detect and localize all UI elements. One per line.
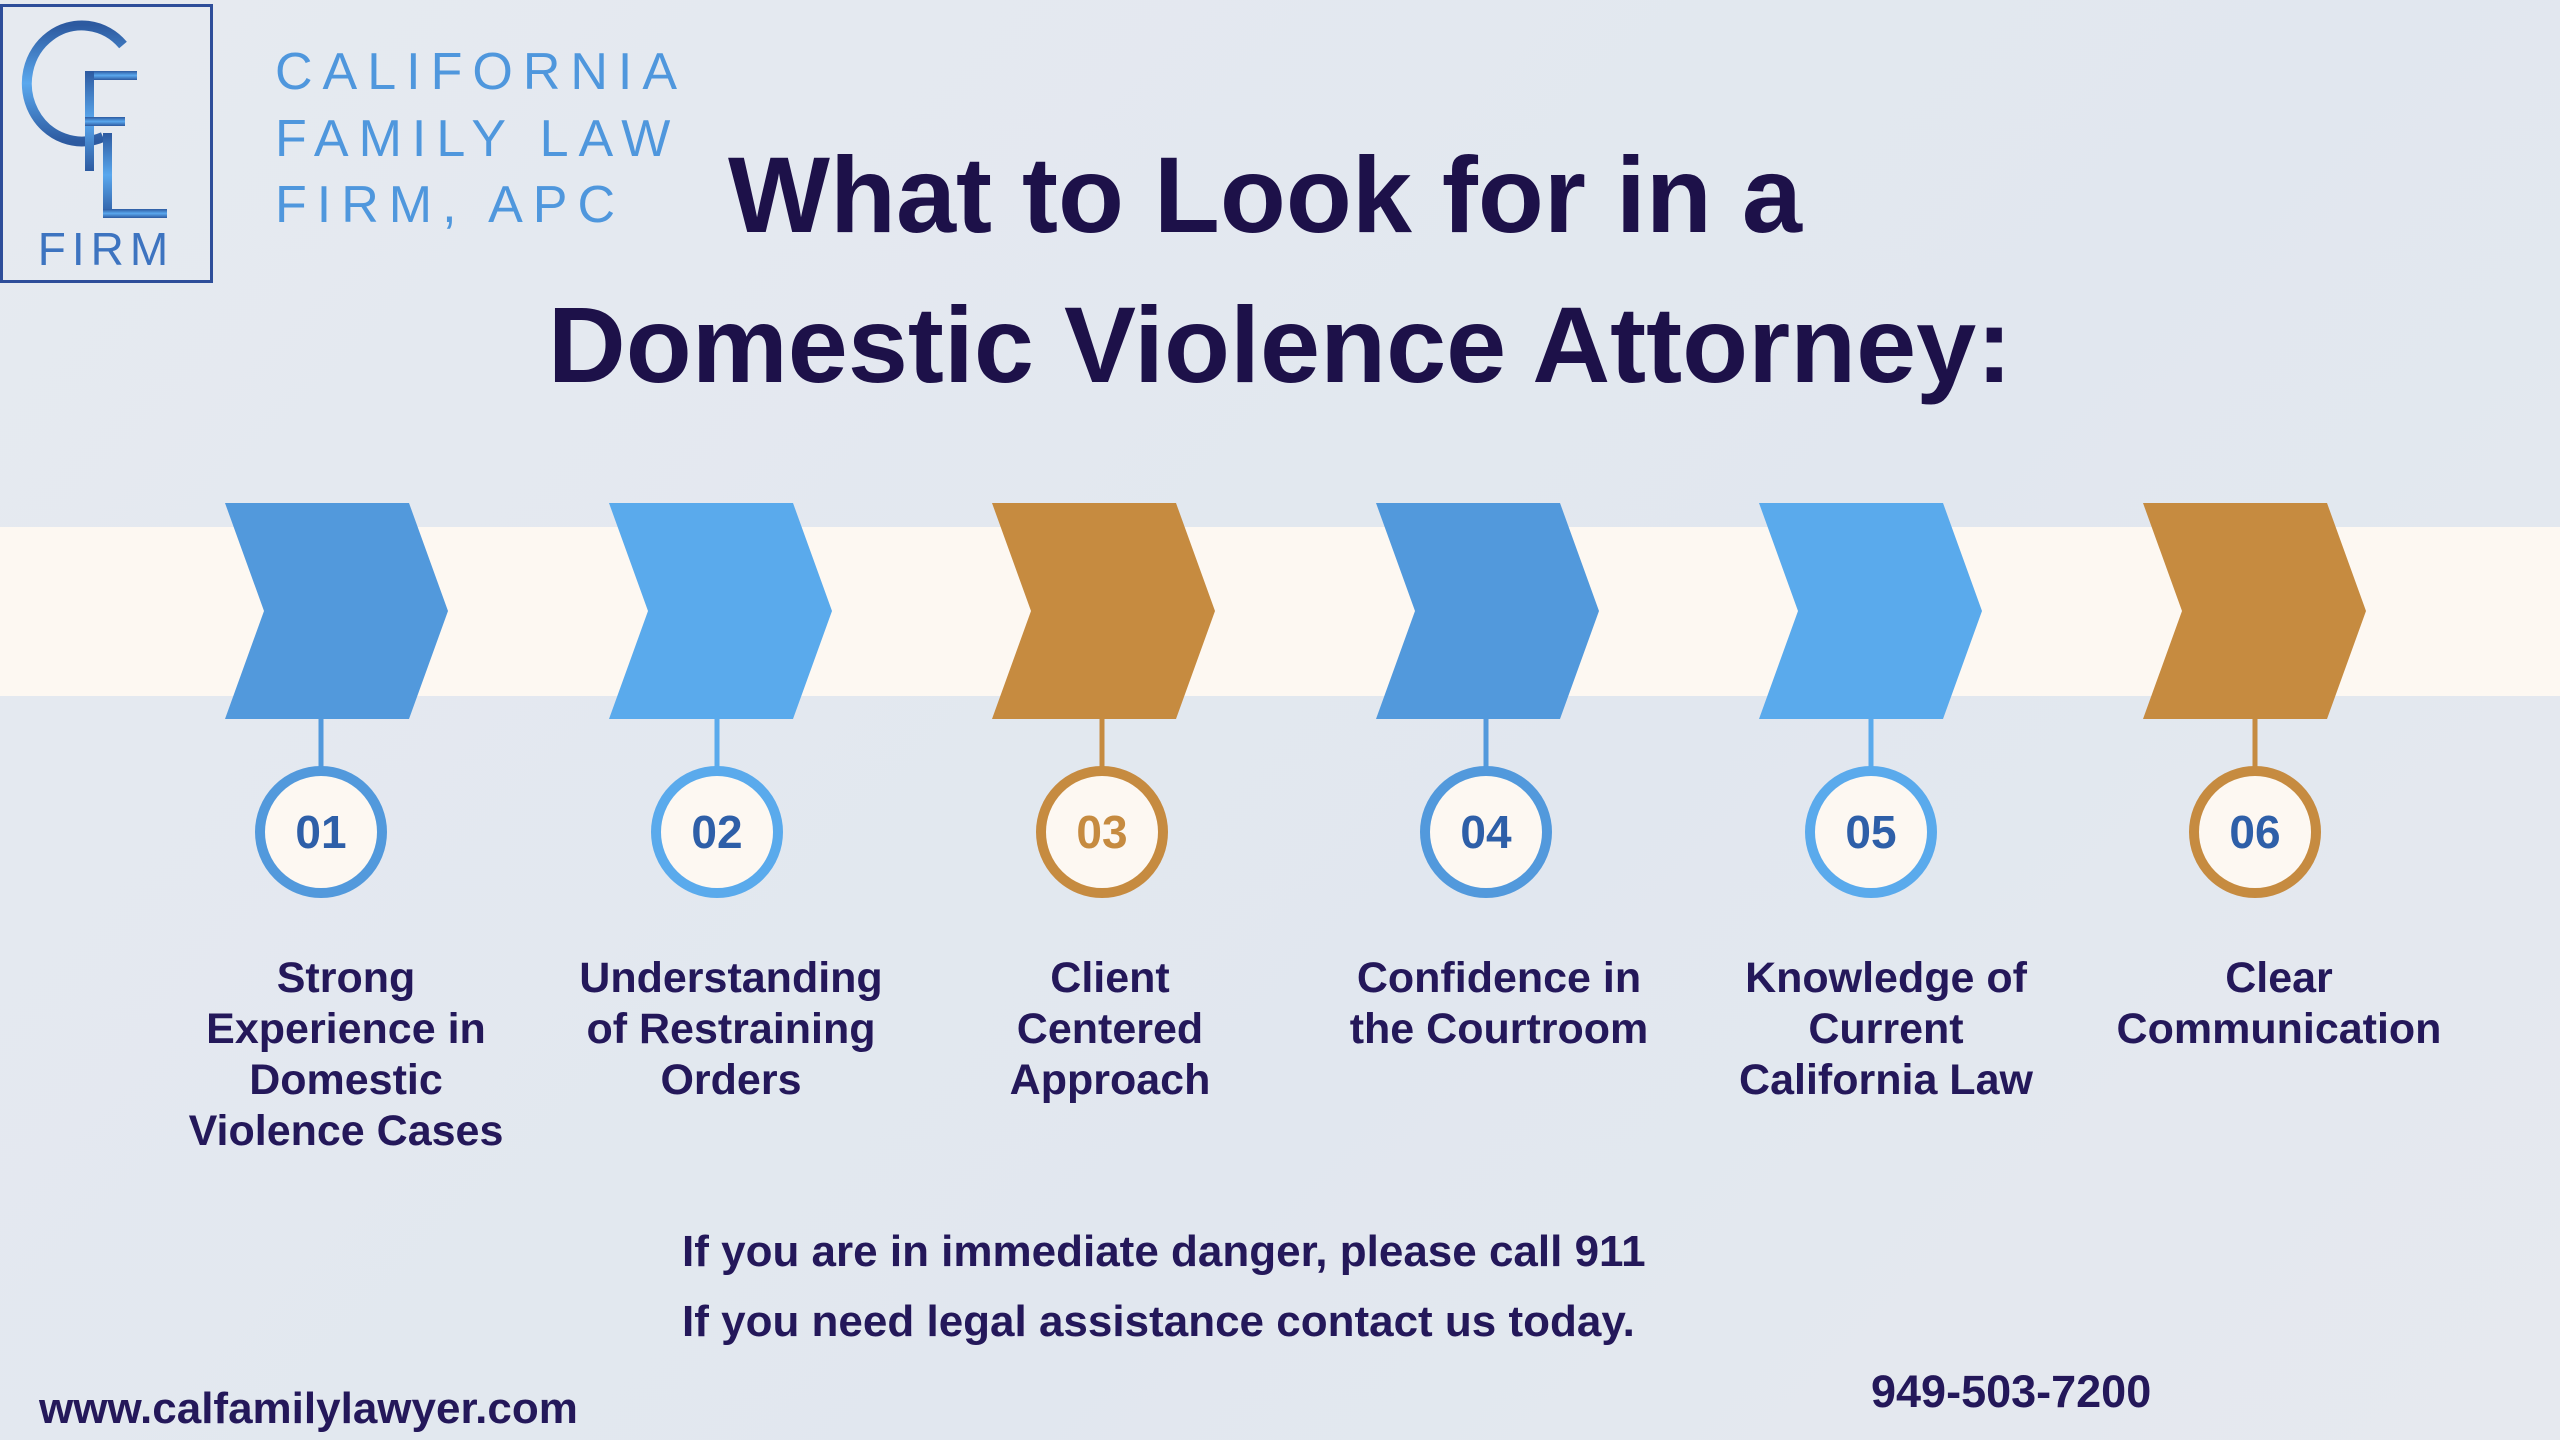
step 1 chevron: [225, 503, 448, 893]
item 4 text: the Courtroom: [1350, 1005, 1648, 1053]
item 2 text: of Restraining: [586, 1005, 876, 1053]
item 2 text: Orders: [660, 1056, 802, 1104]
step 6 chevron: 06: [2229, 806, 2281, 858]
step 2 chevron: [609, 503, 832, 893]
step 5 chevron: [1759, 503, 1982, 893]
logo text: FAMILY LAW: [275, 110, 680, 168]
item 1 text: Strong: [277, 954, 415, 1002]
item 6 text: Clear: [2225, 954, 2333, 1002]
title: Domestic Violence Attorney:: [548, 284, 2012, 405]
item 2 text: Understanding: [579, 954, 883, 1002]
item 1 text: Violence Cases: [189, 1107, 503, 1155]
item 1 text: Experience in: [206, 1005, 486, 1053]
item 3 text: Centered: [1017, 1005, 1203, 1053]
call to action: [682, 1227, 1646, 1346]
call to action: If you are in immediate danger, please call 911: [682, 1227, 1646, 1276]
item 5 text: [1739, 954, 2033, 1104]
step 4 chevron: 04: [1460, 806, 1512, 858]
item 4 text: Confidence in: [1357, 954, 1641, 1002]
step 2 chevron: 02: [691, 806, 743, 858]
logo text: CALIFORNIA: [275, 43, 687, 101]
item 1 text: Domestic: [249, 1056, 443, 1104]
step 1 chevron: 01: [295, 806, 347, 858]
step 3 chevron: [992, 503, 1215, 893]
chevrons timeline: [225, 503, 2366, 898]
step 6 chevron: [2143, 503, 2366, 893]
logo: FIRM: [38, 223, 174, 275]
website: www.calfamilylawyer.com: [39, 1384, 578, 1433]
logo text: FIRM, APC: [275, 176, 625, 234]
item 4 text: [1350, 954, 1648, 1053]
item 5 text: California Law: [1739, 1056, 2033, 1104]
item 5 text: Knowledge of: [1745, 954, 2027, 1002]
step 5 chevron: 05: [1845, 806, 1897, 858]
item 6 text: Communication: [2117, 1005, 2441, 1053]
logo text: [275, 43, 687, 234]
item 6 text: [2117, 954, 2441, 1053]
item 2 text: [579, 954, 883, 1104]
item 3 text: Approach: [1010, 1056, 1210, 1104]
logo: [0, 4, 213, 283]
step 4 chevron: [1376, 503, 1599, 893]
call to action: If you need legal assistance contact us today.: [682, 1297, 1635, 1346]
title: What to Look for in a: [728, 134, 1802, 255]
item 3 text: [1010, 954, 1210, 1104]
item 1 text: [189, 954, 503, 1155]
item 3 text: Client: [1050, 954, 1170, 1002]
item 5 text: Current: [1808, 1005, 1964, 1053]
timeline band: [0, 527, 2560, 696]
title: [548, 134, 2012, 405]
phone: 949-503-7200: [1871, 1366, 2151, 1417]
step 3 chevron: 03: [1076, 806, 1128, 858]
